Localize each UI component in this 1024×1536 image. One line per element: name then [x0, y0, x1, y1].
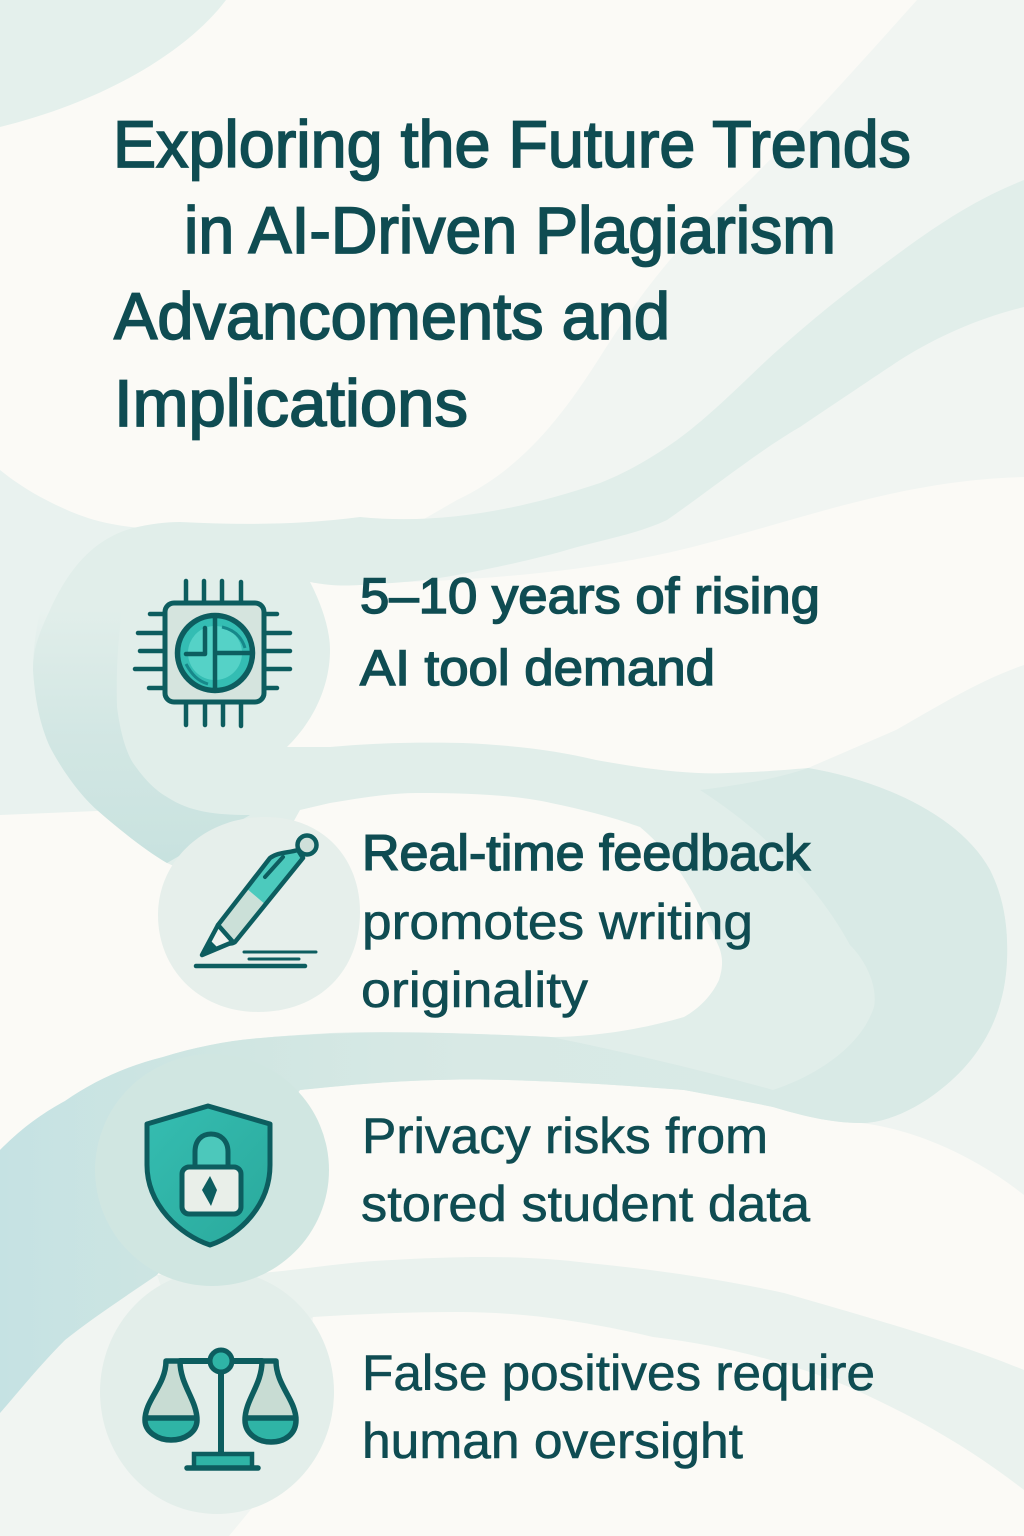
- title: Implications: [114, 366, 468, 440]
- icon: balance scales: [145, 1350, 296, 1468]
- panel: item 3, privacy risks: [95, 1054, 810, 1286]
- title: in AI-Driven Plagiarism: [184, 193, 836, 267]
- text: false positives require human oversight: [362, 1345, 875, 1469]
- background: darker crescent of chip lobe: [33, 610, 250, 863]
- icon: shield with padlock: [147, 1106, 270, 1245]
- text: real-time feedback promotes writing originality: [361, 825, 811, 1018]
- background: lower-left tint: [0, 1275, 313, 1536]
- text: 5–10 years of rising AI tool demand: AI tool demand: [360, 640, 715, 696]
- text: 5–10 years of rising AI tool demand: [360, 568, 820, 696]
- text: 5–10 years of rising AI tool demand: 5–10 years of rising: [360, 568, 820, 624]
- panel: circle behind pen icon: [158, 817, 360, 1012]
- panel: circle behind shield icon: [95, 1054, 329, 1286]
- title: Exploring the Future Trends: [113, 107, 911, 181]
- background: top-left swoosh: [0, 0, 226, 127]
- background: upper-right faint tint: [313, 0, 1024, 583]
- background: shield ribbon gradient: [0, 1033, 773, 1413]
- text: real-time feedback promotes writing originality: originality: [361, 962, 588, 1018]
- icon: AI chip: [135, 581, 290, 726]
- background: lower arc band: [157, 1257, 1024, 1490]
- background: right-edge faint tint: [808, 665, 1024, 1195]
- text: privacy risks from stored student data: Privacy risks from: [362, 1108, 768, 1164]
- text: privacy risks from stored student data: stored student data: [361, 1176, 810, 1232]
- title: Advancoments and: [114, 279, 670, 353]
- panel: circle behind scales icon: [100, 1270, 334, 1514]
- text: false positives require human oversight: human oversight: [362, 1413, 743, 1469]
- panel: item 1, AI tool demand: [135, 568, 820, 726]
- icon: pen: [196, 836, 316, 966]
- text: real-time feedback promotes writing originality: promotes writing: [362, 894, 753, 950]
- panel: item 2, real-time feedback: [158, 817, 811, 1018]
- title: [113, 107, 911, 440]
- background: left tint: [0, 470, 140, 815]
- text: false positives require human oversight: False positives require: [362, 1345, 875, 1401]
- text: real-time feedback promotes writing originality: Real-time feedback: [362, 825, 811, 881]
- panel: item 4, false positives: [100, 1270, 875, 1514]
- background: darker right loop of ribbon: [700, 768, 1007, 1123]
- text: privacy risks from stored student data: [361, 1108, 810, 1232]
